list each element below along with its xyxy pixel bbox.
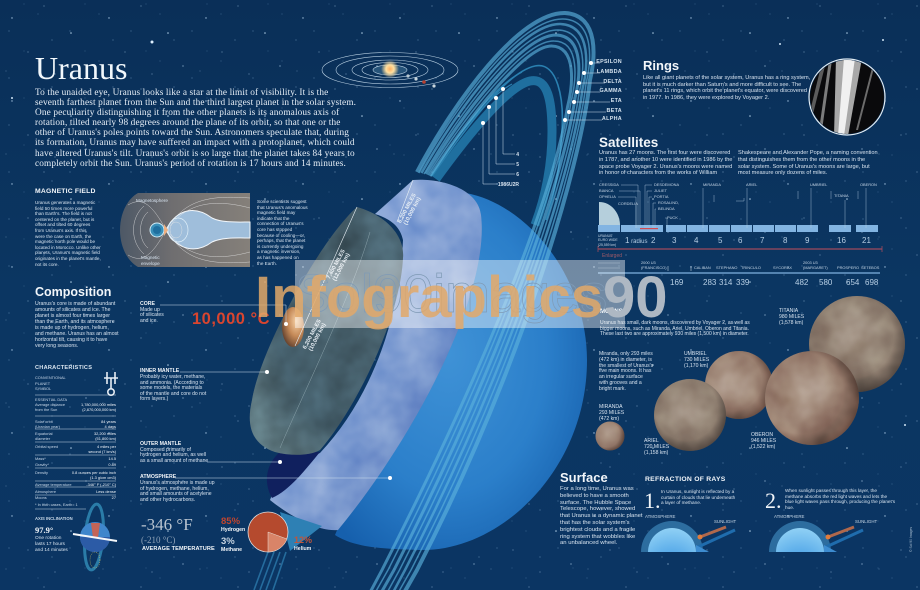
label: Hydrogen — [221, 527, 245, 533]
label: scale unit: URANUS' EURO WIDE (25,559 km) — [598, 234, 618, 247]
credit: © Sol 90 Images — [909, 527, 913, 552]
illustration: Uranus cutaway — [250, 180, 587, 550]
numeral 2: 2. — [765, 488, 782, 513]
footnote: * In both cases, Earth= 1 — [35, 502, 78, 507]
heading: ATMOSPHERE — [140, 474, 176, 480]
label: Titania: TITANIA 980 MILES (1,578 km) — [779, 308, 804, 326]
callout: outer mantle — [140, 441, 208, 464]
percentage: 3% — [221, 536, 235, 547]
chart: satellite distance bar — [598, 185, 882, 273]
heading: rings: Rings — [643, 58, 679, 73]
Trinculo: TRINCULO — [741, 265, 761, 270]
label: sunlight 1: SUNLIGHT — [714, 519, 736, 524]
label: atmosphere 2: ATMOSPHERE — [774, 514, 804, 519]
row values: atmosphere and moons: Less dense 27 — [96, 489, 116, 500]
description: Probably icy water, methane, and ammonia. (According to some models, the materials of the mantle and core do not form layers.) — [140, 374, 206, 402]
text: composition: Uranus's core is made of abundant amounts of silicates and ice. The planet is almost four times larger than the Earth, and its atmosphere is made up of hydrogen, helium, and methane. Uranus has an almost horizontal tilt, causing it to have very long seasons. — [35, 301, 119, 349]
radius 8: 8 — [783, 236, 787, 245]
698: 698 — [865, 278, 878, 287]
diagram: magnetosphere — [120, 193, 250, 267]
heading: refraction of rays: REFRACTION OF RAYS — [645, 476, 726, 483]
radius 2: 2 — [651, 236, 655, 245]
moon: Ariel — [654, 379, 726, 451]
heading: magnetic field: MAGNETIC FIELD — [35, 188, 96, 195]
label: Miranda: MIRANDA 293 MILES (472 km) — [599, 404, 624, 422]
row: density: Density — [35, 470, 48, 475]
description: Uranus's atmosphere is made up of hydrogen, methane, helium, and small amounts of acetylene and other hydrocarbons. — [140, 480, 215, 503]
beta: BETA — [607, 108, 622, 114]
label: atmosphere 1: ATMOSPHERE — [645, 514, 675, 519]
label: Oberon: OBERON — [860, 182, 877, 186]
diagram: refraction of rays 1 — [641, 521, 736, 552]
row values: orbit: 84 years 4 days — [101, 418, 116, 429]
Sycorax: SYCORAX — [773, 265, 792, 270]
label: Ariel: ARIEL — [746, 182, 757, 186]
row labels: ESSENTIAL DATA Average distance from the Sun — [35, 396, 67, 412]
580: 580 — [819, 278, 832, 287]
label: Methane — [221, 547, 242, 553]
axis: outer satellite radii — [670, 278, 878, 287]
heading: CORE — [140, 301, 155, 307]
text: refraction 1: In Uranus, sunlight is reflected by a curtain of clouds that lie underneath a layer of methane. — [661, 489, 735, 505]
text: refraction 2: When sunlight passes through this layer, the methane absorbs the red light waves and lets the blue light waves pass through, producing the planet's hue. — [785, 488, 895, 510]
Prospero: PROSPERO — [837, 265, 859, 270]
row: orbit: Solar orbit (Uranian year) — [35, 418, 60, 429]
intro text: To the unaided eye, Uranus looks like a star at the limit of visibility. It is the seventh farthest planet from the Sun and the third largest planet in the solar system. One peculiarity distinguishing it from the other planets is its anomalous axis of rotation, tilted nearly 98 degrees around the plane of its orbit, so that one or the other of Uranus's poles points toward the Sun. Astronomers speculate that, during its formation, Uranus may have suffered an impact with a protoplanet, which could have altered Uranus's tilt. Uranus's orbit is so large that the planet takes 84 years to completely orbit the Sun. Uranus's period of rotation is 17 hours and 14 minutes. — [35, 88, 356, 169]
illustration: rings behind the planet — [431, 66, 562, 225]
labels: inner satellites: CRESSIDA BIANCA OPHELIA — [599, 182, 619, 198]
value: average temperature F: -346 °F — [141, 515, 193, 534]
Margaret: 2003 U3 (MARGARET) — [803, 260, 828, 270]
heading: satellites: Satellites — [599, 135, 658, 150]
label: magnetic envelope: Magnetic envelope — [141, 255, 160, 266]
chart: characteristics dividers — [35, 395, 116, 509]
illustration: rings crossing the planet — [366, 13, 594, 590]
text: surface: For a long time, Uranus was believed to have a smooth surface. The Hubble Space Telescope, however, showed that Uranus is a dynamic planet that has the solar system's brightest clouds and a fragile ring system that wobbles like an unbalanced wheel. — [560, 486, 643, 546]
table: characteristics — [35, 375, 116, 507]
Stephano: STEPHANO — [716, 265, 737, 270]
Setebos: SETEBOS — [861, 265, 879, 270]
radius 16: 16 — [837, 236, 846, 245]
row: diameter: Equatorial diameter — [35, 431, 53, 441]
radius 3: 3 — [672, 236, 676, 245]
description: Made up of silicates and ice. — [140, 307, 164, 324]
row: speed: Orbital speed — [35, 444, 58, 448]
callouts: planet layer markers — [160, 305, 392, 480]
text: satellites column 1: Uranus has 27 moons. The first four were discovered in 1787, and another 10 were identified in 1986 by the space probe Voyager 2. Uranus's moons were named in honor of characters from the works of William — [599, 150, 732, 176]
image: ring close-up — [807, 58, 885, 136]
radius 7: 7 — [760, 236, 764, 245]
label: sunlight 2: SUNLIGHT — [855, 519, 877, 524]
row values: mass: 14.5 0.89 — [108, 456, 116, 467]
delta: DELTA — [603, 79, 622, 85]
heading: moons: MOONS — [600, 309, 623, 315]
lambda: LAMBDA — [597, 69, 622, 75]
pie chart: atmosphere composition — [248, 512, 322, 552]
339: 339 — [736, 278, 749, 287]
654: 654 — [846, 278, 859, 287]
row value: temperature: -346° F (-210° C) — [86, 482, 116, 487]
radius 9: 9 — [805, 236, 809, 245]
text: satellites column 2: Shakespeare and Alexander Pope, a naming convention that distinguishes them from the other moons in the solar system. Some of Uranus's moons are large, but most measure only dozens of miles. — [738, 150, 878, 176]
gamma: GAMMA — [600, 88, 622, 94]
Caliban: CALIBAN — [694, 265, 711, 270]
measure label: outer mantle diameter: 6,200 MILES (10,000 km) — [397, 193, 422, 226]
heading: composition: Composition — [35, 285, 111, 299]
moon: Oberon — [765, 351, 859, 445]
value: hydrogen — [221, 516, 245, 533]
radius 6: 6 — [738, 236, 742, 245]
283: 283 — [703, 278, 716, 287]
watermark overlay: Infographics90 — [255, 265, 668, 330]
482: 482 — [795, 278, 808, 287]
percentage: 12% — [294, 535, 312, 545]
title: Uranus — [35, 50, 127, 86]
epsilon: EPSILON — [596, 59, 622, 65]
labels: rings — [596, 59, 622, 122]
169: 169 — [670, 278, 683, 287]
label: Helium — [294, 546, 311, 552]
text: Miranda: Miranda, only 293 miles (472 km) in diameter, is the smallest of Uranus's five main moons. It has an irregular surface with grooves and a bright mark. — [599, 351, 653, 392]
planet atmosphere layer — [335, 193, 587, 550]
numeral 1: 1. — [644, 488, 660, 513]
moon: Miranda — [596, 422, 624, 450]
label: Miranda: MIRANDA — [703, 182, 721, 186]
radius 1: 1 radius — [625, 236, 647, 245]
labels: outer satellites — [641, 260, 880, 270]
value: core temperature: 10,000 °C — [192, 310, 270, 328]
label: exterior moons: Enlarged — [602, 253, 622, 259]
measure label: core diameter: 6,200 MILES (10,000 km) — [302, 319, 327, 352]
icon: planet axis inclination — [73, 503, 117, 571]
rows: mass to density: Mass* Gravity* — [35, 456, 49, 467]
row: temperature: Average temperature — [35, 482, 71, 487]
percentage: 85% — [221, 516, 240, 527]
description: Composed primarily of hydrogen and helium, as well as a small amount of methane — [140, 446, 208, 464]
planet quarter — [599, 202, 620, 225]
value: axis inclination: 97.9° — [35, 525, 53, 535]
text: axis inclination: One rotation lasts 17 hours and 14 minutes — [35, 536, 68, 552]
row values: diameter: 32,200 miles (51,800 km) — [94, 431, 116, 441]
heading: axis inclination: AXIS INCLINATION — [35, 516, 73, 521]
inner mantle layer — [250, 207, 403, 455]
core — [282, 307, 304, 347]
text: moons: Uranus has small, dark moons, discovered by Voyager 2, as well as bigger moons, such as Miranda, Ariel, Umbriel, Oberon and Titania. These last two are approximately 930 miles (1,500 km) in diameter. — [600, 320, 750, 337]
label: Umbriel: UMBRIEL 730 MILES (1,170 km) — [684, 351, 709, 368]
radius 21: 21 — [862, 236, 871, 245]
value: average temperature C: (-210 °C) — [141, 535, 175, 545]
row values: speed: 4 miles per second (7 km/s) — [88, 444, 116, 454]
moon: Umbriel — [705, 351, 773, 419]
heading: characteristics: CHARACTERISTICS — [35, 365, 92, 371]
callouts: ring markers — [481, 61, 610, 184]
diagram: refraction of rays 2 — [769, 521, 864, 552]
row values: distance: 1,780,000,000 miles (2,870,000,000 km) — [81, 402, 116, 412]
callout: core — [140, 301, 164, 324]
moon: Titania — [809, 296, 905, 392]
text: magnetic field: Uranus generates a magnetic field 50 times more powerful than Earth's. The field is not centered on the planet, but is offset and tilted 60 degrees from Uranus's axis. If this were the case on Earth, the magnetic north pole would be located in Morocco. Unlike other planets, Uranus's magnetic field originates in the planet's mantle, not its core. — [35, 200, 101, 267]
value: helium — [294, 535, 312, 552]
label: average temperature: AVERAGE TEMPERATURE — [142, 546, 215, 552]
rows: atmosphere and moons: Atmosphere Moons — [35, 489, 56, 500]
labels: Rosalind and Belinda: ROSALIND, BELINDA — [658, 200, 679, 211]
watermark overlay: Sol90images — [295, 264, 607, 324]
heading: INNER MANTLE — [140, 368, 179, 374]
Francisco: 2000 U3 (FRANCISCO) — [641, 260, 667, 270]
text: magnetic field note: Some scientists suggest that Uranus's anomalous magnetic field may indicate that the connection of Uranus's core has stopped because of cooling—or, perhaps, that the planet is currently undergoing a magnetic inversion, as has happened on the Earth. — [257, 199, 308, 266]
heading: OUTER MANTLE — [140, 441, 181, 447]
symbol label: CONVENTIONAL PLANET SYMBOL — [35, 375, 66, 391]
label: Ariel: ARIEL 720 MILES (1,158 km) — [644, 438, 669, 456]
diagram: solar system orbits — [322, 52, 458, 88]
text: rings: Like all giant planets of the solar system, Uranus has a ring system, but it is much darker than Saturn's and more difficult to see. The planet's 11 rings, which orbit the planet's equator, were discovered in 1977. In 1986, they were explored by Voyager 2. — [643, 75, 810, 101]
eta: ETA — [611, 98, 622, 104]
label: Oberon: OBERON 946 MILES (1,522 km) — [751, 432, 776, 450]
callout: atmosphere — [140, 474, 215, 503]
axis: radii numbers — [625, 236, 871, 245]
label: Cordelia: CORDELIA — [618, 201, 638, 206]
labels: inner rings: 4 5 6 1986U2R — [498, 152, 519, 188]
radius 5: 5 — [718, 236, 722, 245]
illustration: far side of the rings at the bottom — [254, 552, 286, 590]
alpha: ALPHA — [602, 116, 622, 122]
row values: density: 0.8 ounces per cubic inch (1.3 g/cm cm3) — [72, 470, 116, 480]
measure label: inner mantle diameter: 7,400 MILES (12,000 km) — [326, 249, 351, 282]
heading: surface: Surface — [560, 470, 608, 485]
labels: magnetosphere: Magnetosphere — [136, 198, 168, 203]
314: 314 — [719, 278, 732, 287]
labels: mid satellites: DESDEMONA JULIET PORTIA — [654, 182, 679, 198]
value: methane — [221, 536, 242, 553]
callout: inner mantle — [140, 368, 206, 402]
radius 4: 4 — [694, 236, 698, 245]
label: Titania: TITANIA — [834, 193, 849, 198]
outer mantle layer — [270, 180, 482, 530]
icon: Uranus planet symbol — [104, 372, 118, 395]
label: Puck: PUCK — [667, 215, 678, 220]
label: Umbriel: UMBRIEL — [810, 182, 827, 186]
